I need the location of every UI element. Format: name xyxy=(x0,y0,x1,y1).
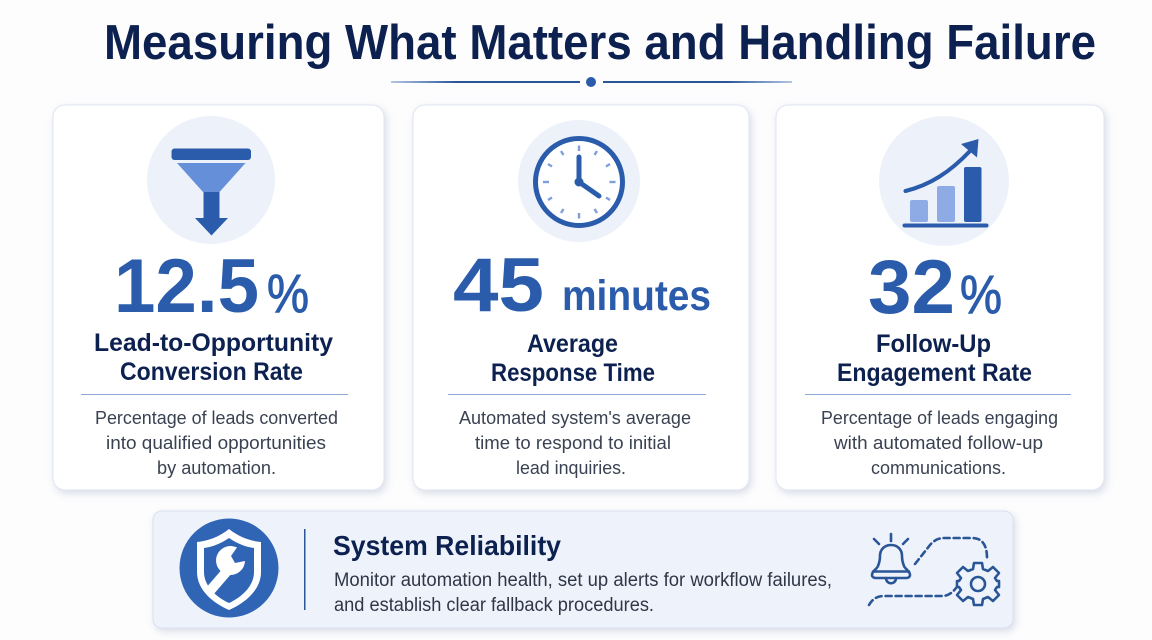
description xyxy=(459,408,691,478)
description xyxy=(95,408,338,478)
metric value: % xyxy=(960,265,1002,325)
description: with automated follow-up xyxy=(833,433,1043,453)
panel: lead-to-opportunity conversion rate xyxy=(53,105,384,490)
metric heading: Follow-Up xyxy=(876,330,991,358)
description: Percentage of leads converted xyxy=(95,408,338,428)
metric heading: Response Time xyxy=(491,359,655,387)
icon: shield with wrench xyxy=(180,518,278,618)
metric heading xyxy=(94,329,333,386)
metric value: 32 xyxy=(868,245,955,330)
description: communications. xyxy=(871,458,1006,478)
description: and establish clear fallback procedures. xyxy=(334,595,654,616)
title divider with dot xyxy=(391,77,792,87)
metric value xyxy=(868,245,1002,330)
description: into qualified opportunities xyxy=(106,433,326,453)
description: Monitor automation health, set up alerts for workflow failures, xyxy=(334,570,832,591)
title: Measuring What Matters and Handling Failure xyxy=(104,16,1096,70)
metric value: 12.5 xyxy=(114,244,259,329)
icon: rising bar chart xyxy=(879,116,1009,246)
icon: funnel xyxy=(147,116,275,244)
panel: average response time xyxy=(413,105,749,490)
metric value: 45 xyxy=(453,243,544,328)
panel: follow-up engagement rate xyxy=(776,105,1104,490)
heading: System Reliability xyxy=(333,530,561,561)
metric value: minutes xyxy=(562,272,711,320)
metric heading: Engagement Rate xyxy=(837,359,1032,387)
description: by automation. xyxy=(157,458,276,478)
description: Automated system's average xyxy=(459,408,691,428)
description: Percentage of leads engaging xyxy=(821,408,1058,428)
metric value: % xyxy=(267,264,309,324)
description: time to respond to initial xyxy=(475,433,671,453)
metric heading xyxy=(491,330,655,387)
metric heading: Conversion Rate xyxy=(120,358,303,386)
icon: clock xyxy=(518,120,640,242)
metric heading: Lead-to-Opportunity xyxy=(94,329,333,357)
description: lead inquiries. xyxy=(516,458,626,478)
metric heading xyxy=(837,330,1032,387)
panel: system reliability xyxy=(153,511,1013,628)
description xyxy=(334,570,832,616)
metric heading: Average xyxy=(527,330,618,358)
icon: alert bell linked to gear xyxy=(869,534,999,605)
description xyxy=(821,408,1058,478)
metric value xyxy=(453,243,711,328)
